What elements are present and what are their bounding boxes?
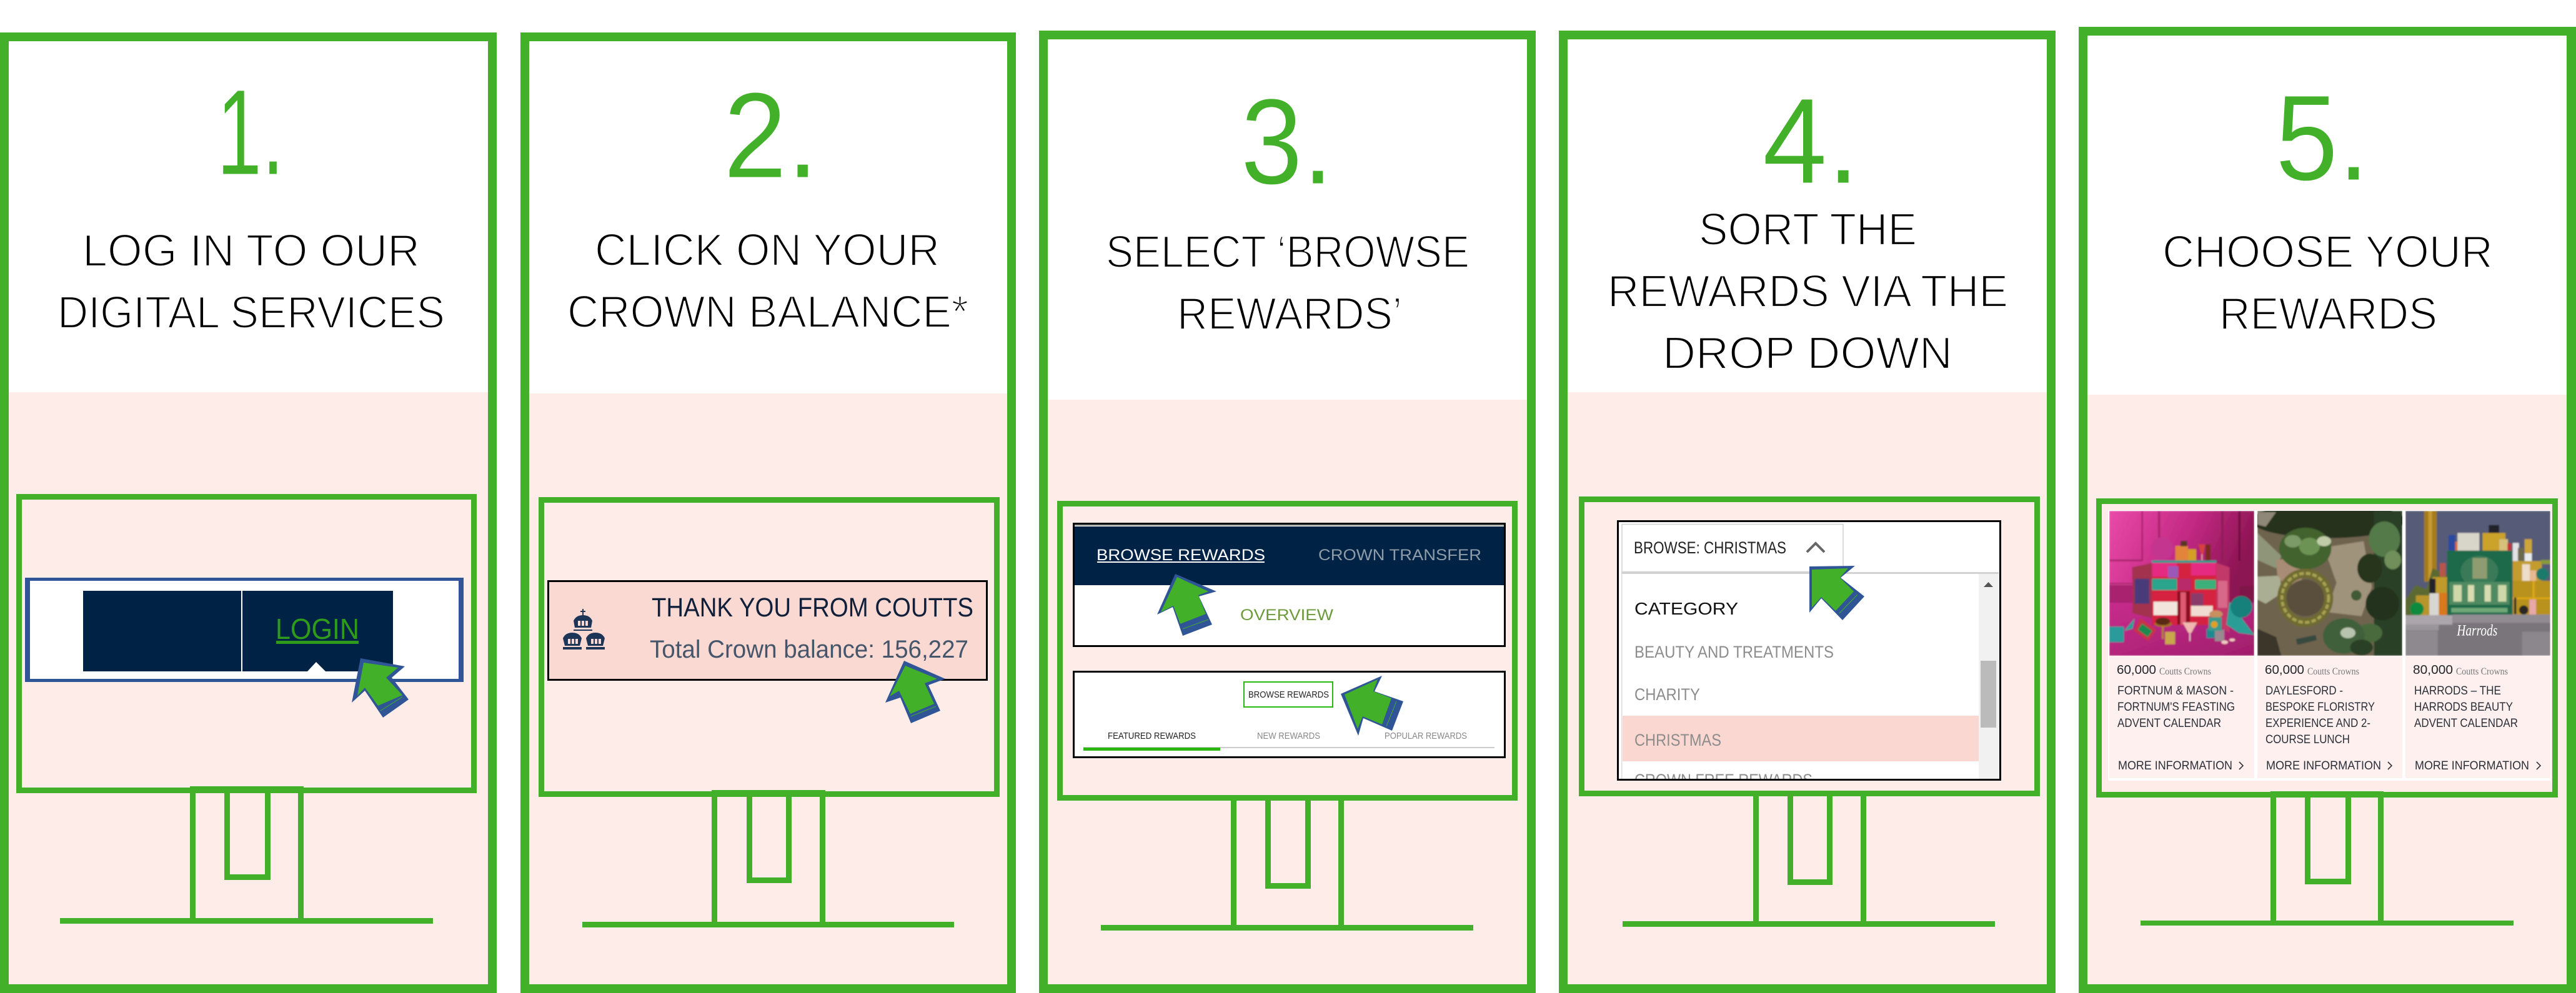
- screenshot: browse rewards nav: [1073, 523, 1504, 646]
- screenshot: crown balance: [549, 581, 987, 679]
- screenshot: browse rewards nav: CROWN TRANSFER: [1318, 546, 1481, 564]
- screenshot: browse rewards tabs: [1073, 672, 1504, 757]
- heading: step 4: REWARDS VIA THE: [1608, 267, 2008, 317]
- screenshot: category dropdown: CATEGORY: [1634, 599, 1738, 618]
- card: Fortnum & Mason: ADVENT CALENDAR: [2117, 717, 2221, 730]
- monitor: step 1: [19, 497, 474, 924]
- heading: step 3: REWARDS’: [1177, 289, 1402, 339]
- screenshot: browse rewards tabs: NEW REWARDS: [1257, 731, 1320, 741]
- card: Harrods: [2405, 511, 2550, 778]
- screenshot: browse rewards tabs: FEATURED REWARDS: [1108, 731, 1196, 741]
- photo: Harrods beauty advent calendar: [2405, 511, 2550, 656]
- card: Daylesford: 60,000: [2265, 663, 2304, 677]
- card: Harrods: 80,000: [2413, 663, 2453, 677]
- step number 1: 1.: [217, 64, 284, 200]
- card: Daylesford: EXPERIENCE AND 2-: [2265, 717, 2370, 730]
- card: Harrods: HARRODS – THE: [2414, 684, 2501, 698]
- photo: Harrods beauty advent calendar: Harrods: [2457, 621, 2497, 639]
- heading: step 5: REWARDS: [2219, 289, 2437, 339]
- card: Daylesford: MORE INFORMATION: [2266, 759, 2381, 773]
- heading: step 4: DROP DOWN: [1663, 329, 1952, 378]
- arrow: step 2: [885, 661, 945, 723]
- heading: step 5: CHOOSE YOUR: [2162, 227, 2493, 277]
- card: Harrods: Coutts Crowns: [2456, 666, 2508, 677]
- heading: step 1: [57, 226, 445, 338]
- screenshot: category dropdown: CHARITY: [1634, 685, 1700, 704]
- card: Fortnum & Mason: [2109, 511, 2254, 778]
- step number 4: 4.: [1763, 73, 1859, 209]
- arrow: step 3 top: [1157, 574, 1216, 636]
- card: Harrods: HARRODS BEAUTY: [2414, 701, 2513, 714]
- screenshot: category dropdown: BEAUTY AND TREATMENTS: [1634, 643, 1834, 661]
- card: Fortnum & Mason: Coutts Crowns: [2159, 666, 2211, 677]
- card: Harrods: MORE INFORMATION: [2415, 759, 2529, 773]
- card: Fortnum & Mason: MORE INFORMATION: [2118, 759, 2232, 773]
- panel: step 3: [1039, 31, 1536, 993]
- screenshot: browse rewards nav: BROWSE REWARDS: [1097, 546, 1265, 564]
- monitor: step 5: [2099, 501, 2555, 926]
- panel: step 4: [1559, 31, 2056, 993]
- heading: step 2: CLICK ON YOUR: [595, 225, 940, 275]
- card: Fortnum & Mason: 60,000: [2117, 663, 2156, 677]
- card: Fortnum & Mason: FORTNUM'S FEASTING: [2117, 701, 2235, 714]
- step number 5: 5.: [2275, 70, 2369, 206]
- step number 2: 2.: [724, 67, 818, 204]
- step number 3: 3.: [1241, 74, 1333, 210]
- panel: step 2: [520, 32, 1016, 993]
- screenshot: crown balance: THANK YOU FROM COUTTS: [652, 593, 973, 623]
- heading: step 3: SELECT ‘BROWSE: [1106, 227, 1470, 277]
- heading: step 2: [567, 225, 968, 337]
- screenshot: login bar: [25, 578, 464, 682]
- icon: three crowns: [563, 609, 605, 650]
- screenshot: browse rewards tabs: POPULAR REWARDS: [1385, 731, 1467, 741]
- card: Daylesford: DAYLESFORD -: [2265, 684, 2343, 698]
- heading: step 5: [2162, 227, 2493, 339]
- card: Daylesford: COURSE LUNCH: [2265, 733, 2350, 746]
- screenshot: category dropdown: CHRISTMAS: [1634, 731, 1721, 749]
- screenshot: browse rewards tabs: BROWSE REWARDS: [1248, 690, 1329, 700]
- screenshot: reward cards: [2108, 503, 2551, 781]
- photo: advent calendar on magenta: [2109, 511, 2254, 656]
- screenshot: category dropdown: CROWN FREE REWARDS: [1634, 771, 1813, 789]
- arrow: step 1: [352, 658, 409, 718]
- screenshot: category dropdown: [1579, 521, 2040, 793]
- heading: step 1: DIGITAL SERVICES: [57, 288, 445, 338]
- screenshot: login bar: LOGIN: [276, 613, 359, 645]
- monitor: step 3: [1060, 503, 1514, 931]
- card: Daylesford: Coutts Crowns: [2307, 666, 2359, 677]
- arrow: step 4: [1809, 566, 1864, 620]
- panel: step 1: [0, 32, 497, 993]
- heading: step 4: [1608, 205, 2008, 378]
- heading: step 4: SORT THE: [1699, 205, 1917, 255]
- screenshot: category dropdown: BROWSE: CHRISTMAS: [1634, 538, 1786, 557]
- heading: step 3: [1106, 227, 1470, 339]
- panel: step 5: [2079, 27, 2576, 993]
- heading: step 2: CROWN BALANCE*: [567, 287, 968, 337]
- monitor: step 4: [1582, 500, 2037, 927]
- photo: floristry wreath: [2257, 511, 2402, 656]
- card: Daylesford: [2251, 503, 2405, 778]
- heading: step 1: LOG IN TO OUR: [82, 226, 420, 276]
- card: Harrods: ADVENT CALENDAR: [2414, 717, 2518, 730]
- screenshot: crown balance: Total Crown balance: 156,227: [650, 636, 968, 663]
- card: Fortnum & Mason: FORTNUM & MASON -: [2117, 684, 2234, 698]
- card: Daylesford: BESPOKE FLORISTRY: [2265, 701, 2375, 714]
- arrow: step 3 bottom: [1341, 676, 1403, 736]
- screenshot: browse rewards nav: OVERVIEW: [1240, 606, 1333, 624]
- monitor: step 2: [541, 500, 997, 927]
